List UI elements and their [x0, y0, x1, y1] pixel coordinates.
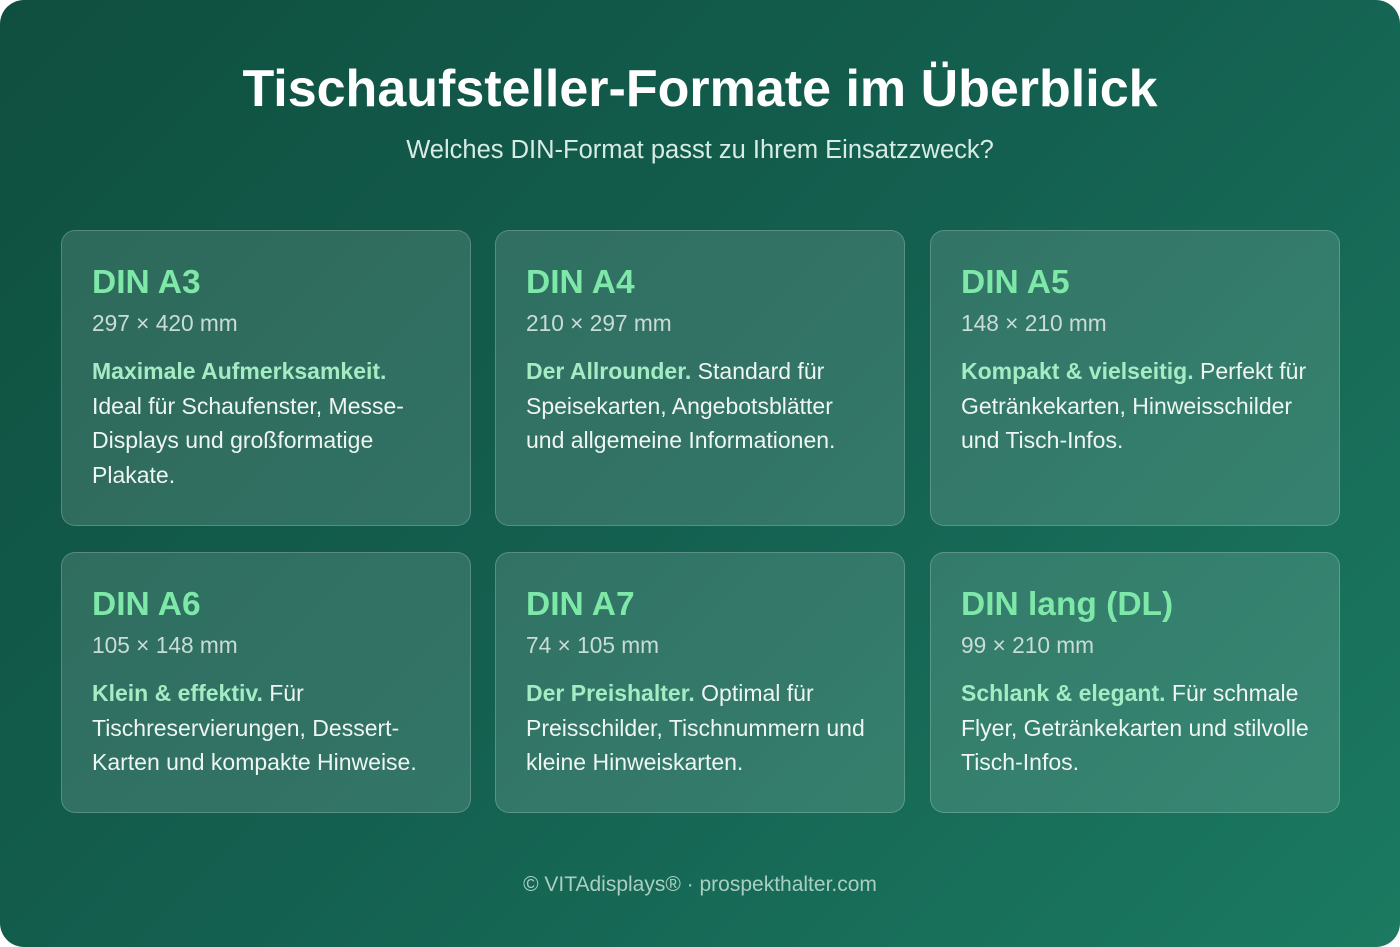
panel: DIN lang: Schlank & elegant. Für schmale Flyer, Getränkekarten und stilvolle Tisch-Infos. [961, 680, 1309, 775]
panel: DIN A3: Maximale Aufmerksamkeit. Ideal für Schaufenster, Messe-Displays und großformatige Plakate. [92, 358, 404, 488]
panel: DIN A5: DIN A5 [961, 264, 1070, 301]
panel: DIN A4: DIN A4 [526, 264, 635, 301]
panel: DIN A5: Kompakt & vielseitig. Perfekt für Getränkekarten, Hinweisschilder und Tisch-Infos. [961, 358, 1306, 453]
panel: DIN lang: 99 × 210 mm [961, 632, 1094, 658]
panel: DIN A7: Der Preishalter. Optimal für Preisschilder, Tischnummern und kleine Hinweiskarten. [526, 680, 865, 775]
panel: DIN A6 [61, 552, 471, 813]
subtitle: Welches DIN-Format passt zu Ihrem Einsatzzweck? [406, 136, 994, 164]
panel: DIN A5 [930, 230, 1340, 526]
panel: DIN A6: DIN A6 [92, 586, 201, 623]
panel: DIN A7 [495, 552, 905, 813]
panel: DIN A5: 148 × 210 mm [961, 310, 1107, 336]
panel: DIN A4: 210 × 297 mm [526, 310, 672, 336]
panel: DIN A3 [61, 230, 471, 526]
panel: DIN A4 [495, 230, 905, 526]
panel: DIN lang: DIN lang (DL) [961, 586, 1173, 623]
panel: DIN A3: DIN A3 [92, 264, 201, 301]
panel: DIN lang [930, 552, 1340, 813]
title: Tischaufsteller-Formate im Überblick [242, 60, 1158, 118]
footer: © VITAdisplays® · prospekthalter.com [523, 873, 877, 896]
panel: DIN A7: 74 × 105 mm [526, 632, 659, 658]
panel: DIN A4: Der Allrounder. Standard für Speisekarten, Angebotsblätter und allgemeine Informationen. [526, 358, 835, 453]
panel: DIN A7: DIN A7 [526, 586, 635, 623]
panel: DIN A6: Klein & effektiv. Für Tischreservierungen, Dessert-Karten und kompakte Hinweise. [92, 680, 417, 775]
panel: DIN A3: 297 × 420 mm [92, 310, 238, 336]
panel: DIN A6: 105 × 148 mm [92, 632, 238, 658]
